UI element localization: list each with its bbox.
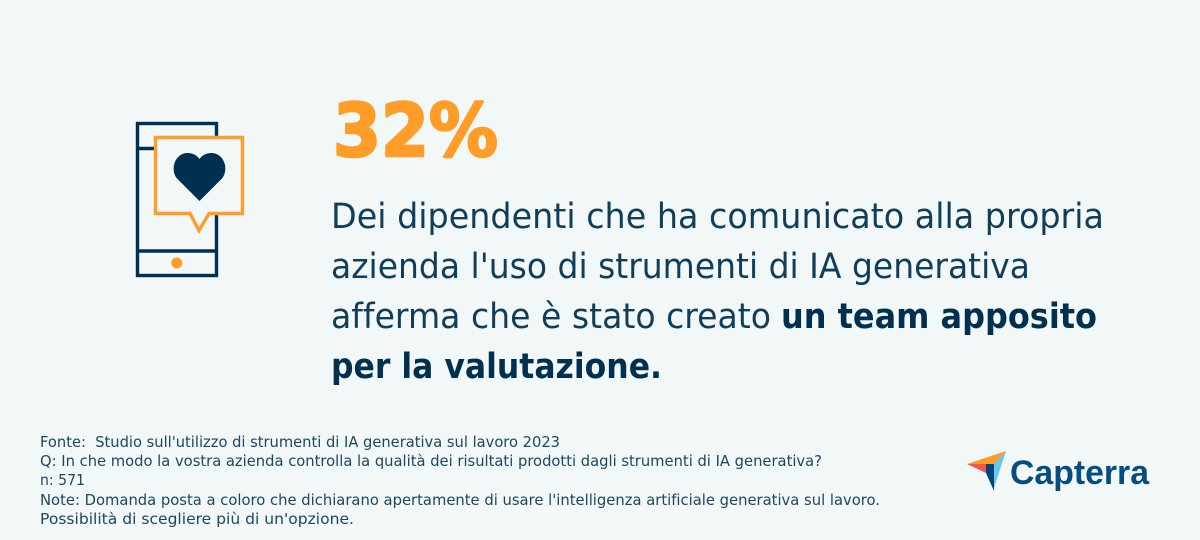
icon: heart	[174, 153, 225, 201]
main statement: per la valutazione.	[331, 347, 662, 387]
main statement: azienda l'uso di strumenti di IA generativa	[331, 247, 1030, 287]
icon: speech bubble	[156, 138, 242, 230]
source notes: n: 571	[40, 471, 85, 489]
icon: phone with heart speech bubble	[138, 124, 242, 276]
source notes: Possibilità di scegliere più di un'opzione.	[40, 510, 354, 528]
main statement: Dei dipendenti che ha comunicato alla propria	[331, 197, 1104, 237]
big percentage: 32%	[333, 89, 498, 174]
source notes	[40, 433, 880, 528]
icon: Capterra arrow	[967, 451, 1006, 491]
icon: phone outline	[138, 124, 216, 276]
main statement: afferma che è stato creato	[331, 297, 771, 337]
source notes: Fonte: Studio sull'utilizzo di strumenti di IA generativa sul lavoro 2023	[40, 433, 560, 451]
logo wordmark: Capterra	[1010, 454, 1150, 492]
icon: phone button	[171, 258, 182, 268]
source notes: Q: In che modo la vostra azienda controlla la qualità dei risultati prodotti dagli strumenti di IA generativa?	[40, 452, 822, 470]
main statement	[331, 197, 1104, 387]
logo: Capterra	[967, 451, 1150, 492]
source notes: Note: Domanda posta a coloro che dichiarano apertamente di usare l'intelligenza artificiale generativa sul lavoro.	[40, 491, 880, 509]
main statement: un team apposito	[781, 297, 1097, 337]
